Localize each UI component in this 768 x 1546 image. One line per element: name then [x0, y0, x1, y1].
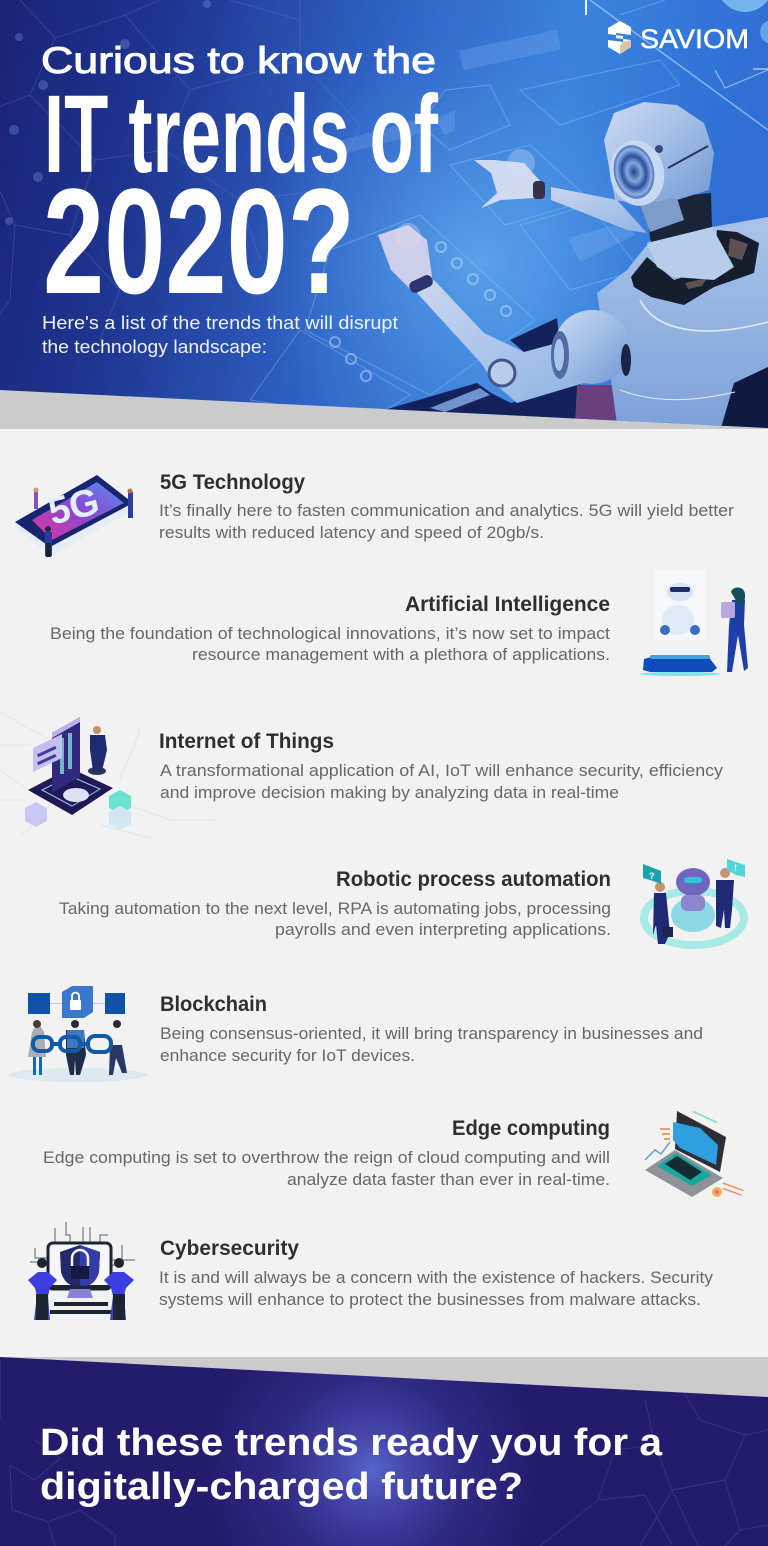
item: Blockchain	[9, 986, 703, 1082]
description: Taking automation to the next level, RPA is automating jobs, processing	[59, 900, 611, 918]
description	[160, 762, 724, 802]
description	[50, 625, 610, 664]
description: Being consensus-oriented, it will bring transparency in businesses and	[160, 1025, 703, 1043]
pie chart hologram	[717, 0, 768, 12]
icon: IoT chip and phone	[0, 712, 215, 838]
title	[41, 40, 438, 325]
description: Being the foundation of technological innovations, it’s now set to impact	[50, 625, 610, 643]
description	[59, 900, 611, 939]
item: 5G Technology	[15, 471, 735, 557]
robot torso	[597, 217, 768, 428]
icon: cybersecurity shield and guards	[28, 1222, 135, 1320]
heading: Robotic process automation	[336, 868, 611, 891]
heading: Internet of Things	[159, 730, 334, 753]
title: IT trends of	[44, 73, 438, 196]
description: A transformational application of AI, IoT will enhance security, efficiency	[160, 762, 724, 780]
description	[43, 1149, 610, 1189]
closing question	[40, 1422, 663, 1508]
intro text	[42, 313, 398, 357]
hero banner	[0, 0, 768, 430]
holographic interface panels	[250, 0, 768, 420]
title: 2020?	[43, 157, 355, 325]
robot purple hip	[575, 385, 618, 421]
description: results with reduced latency and speed of 20gb/s.	[159, 524, 544, 542]
robot lower arm	[417, 280, 584, 403]
footer banner	[0, 1350, 768, 1546]
icon: 5G phone: 5G	[44, 481, 104, 534]
description	[159, 502, 735, 542]
description	[160, 1025, 703, 1065]
heading: Edge computing	[452, 1117, 610, 1140]
robot	[378, 102, 768, 428]
title: Curious to know the	[41, 40, 436, 81]
robot raised hand	[474, 160, 541, 208]
hexagon network pattern	[0, 0, 360, 340]
description: payrolls and even interpreting applications.	[275, 921, 611, 939]
icon: RPA robot and businessmen: !	[734, 863, 737, 873]
logo: SAVIOM: SAVIOM	[640, 24, 749, 54]
description: It is and will always be a concern with the existence of hackers. Security	[159, 1269, 714, 1287]
icon: AI robot and woman	[640, 570, 748, 676]
description: resource management with a plethora of applications.	[192, 646, 610, 664]
description: and improve decision making by analyzing data in real-time	[160, 784, 619, 802]
robot neck	[644, 193, 712, 243]
hero grey band	[0, 380, 768, 429]
intro text: the technology landscape:	[42, 337, 267, 357]
heading: Artificial Intelligence	[405, 593, 610, 616]
description: It’s finally here to fasten communication and analytics. 5G will yield better	[159, 502, 735, 520]
logo: SAVIOM	[608, 21, 749, 54]
description: Edge computing is set to overthrow the reign of cloud computing and will	[43, 1149, 610, 1167]
icon: RPA robot and businessmen	[643, 859, 745, 945]
description: systems will enhance to protect the businesses from malware attacks.	[159, 1291, 701, 1309]
hexagon pattern	[0, 1360, 768, 1546]
robot lower hand	[378, 225, 432, 290]
robot raised arm	[551, 187, 647, 233]
robot chest cavity	[631, 230, 759, 305]
heading: Blockchain	[160, 993, 267, 1016]
heading: 5G Technology	[160, 471, 305, 494]
description: analyze data faster than ever in real-time.	[287, 1171, 610, 1189]
robot elbow	[489, 360, 515, 386]
item: Robotic process automation	[59, 859, 745, 945]
icon: 5G phone	[15, 475, 133, 557]
closing question: digitally-charged future?	[40, 1466, 523, 1508]
closing question: Did these trends ready you for a	[40, 1422, 663, 1464]
heading: Cybersecurity	[160, 1237, 299, 1260]
robot head	[604, 102, 714, 206]
robot face lens	[610, 140, 664, 206]
dark console desk	[384, 318, 768, 430]
item: Edge computing	[43, 1111, 744, 1197]
robot shoulder	[556, 310, 622, 384]
description	[159, 1269, 714, 1309]
item: Artificial Intelligence	[50, 570, 748, 676]
item: Internet of Things	[0, 712, 724, 838]
item: Cybersecurity	[28, 1222, 714, 1320]
icon: edge laptop	[645, 1111, 744, 1197]
icon: RPA robot and businessmen: ?	[649, 871, 654, 881]
footer grey band	[0, 1357, 768, 1407]
icon: logo mark	[608, 21, 631, 54]
icon: blockchain cubes and chain	[9, 986, 147, 1082]
description: enhance security for IoT devices.	[160, 1047, 415, 1065]
intro text: Here's a list of the trends that will disrupt	[42, 313, 398, 333]
